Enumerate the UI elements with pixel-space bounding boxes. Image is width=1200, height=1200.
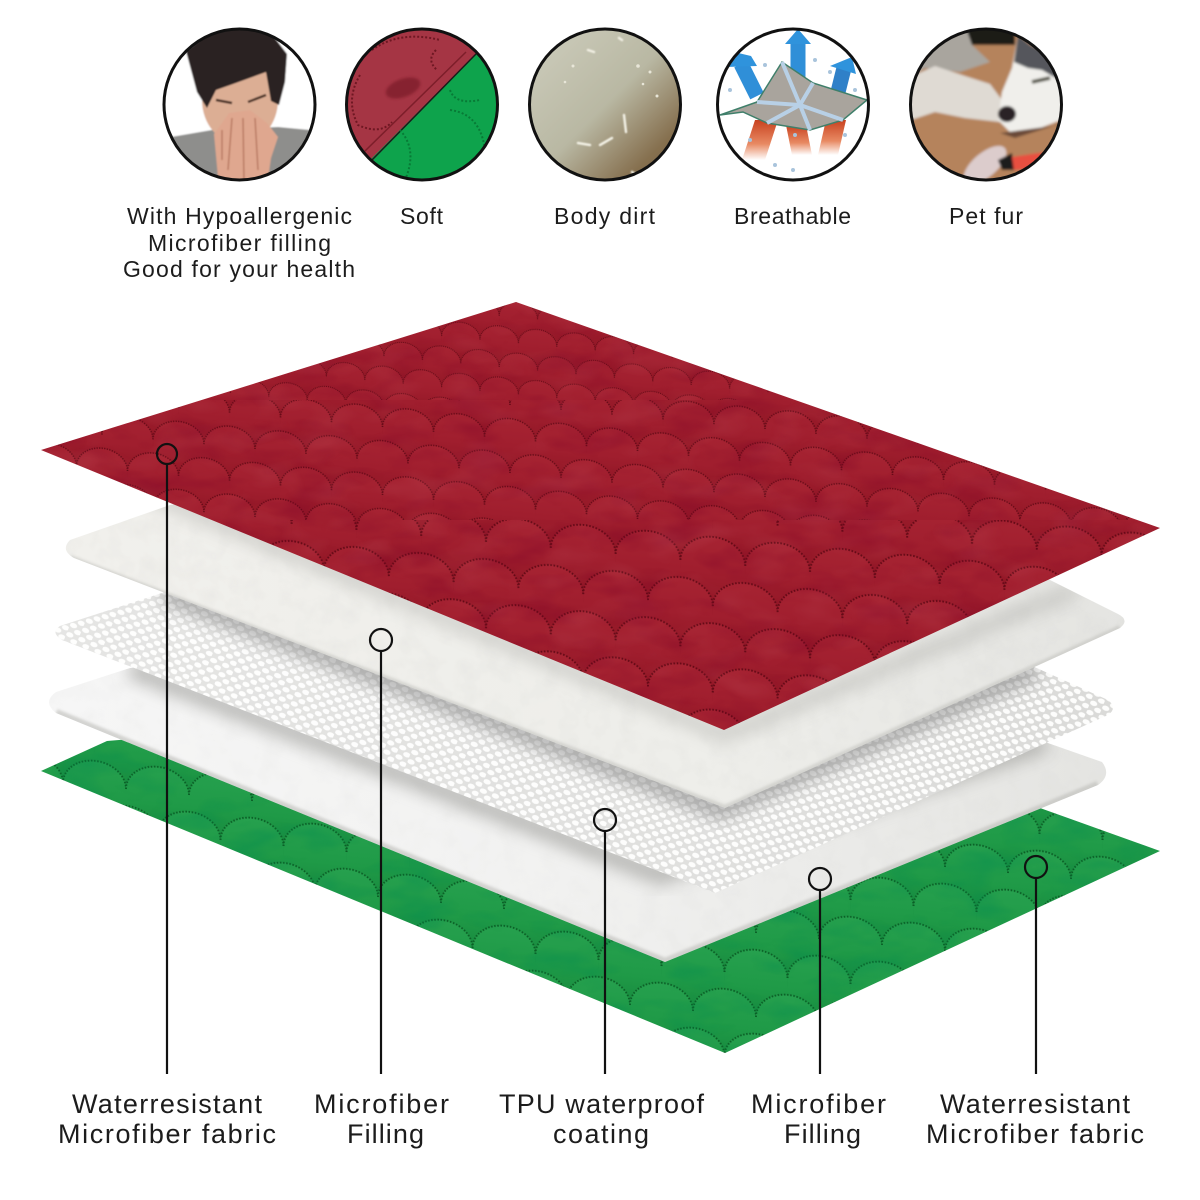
layer: lower microfiber filling [49, 668, 1106, 962]
text: soft caption: Soft [400, 203, 444, 229]
marker: TPU pointer [594, 809, 616, 1074]
text: breathable caption: Breathable [734, 203, 851, 229]
label: waterresistant microfiber fabric left: Waterresistant [72, 1089, 262, 1119]
layer: TPU waterproof coating [56, 592, 1113, 892]
label: microfiber filling left [314, 1089, 449, 1149]
label: waterresistant microfiber fabric right: Microfiber fabric [926, 1119, 1144, 1149]
label: microfiber filling left: Microfiber [314, 1089, 449, 1119]
text: pet fur caption: Pet fur [949, 203, 1023, 229]
text: hypoallergenic caption: With Hypoallergenic [127, 203, 352, 229]
label: microfiber filling right: Filling [784, 1119, 861, 1149]
icon: breathable fabric [720, 30, 867, 172]
icon: breathable ring [718, 29, 868, 180]
marker: red fabric pointer [157, 444, 177, 1074]
layer: red waterresistant fabric [30, 295, 1170, 740]
layer: green waterresistant fabric [41, 740, 1160, 1053]
label: microfiber filling right [751, 1089, 886, 1149]
icon: pet fur ring [910, 29, 1062, 180]
text: hypoallergenic caption [123, 203, 355, 282]
text: hypoallergenic caption: Microfiber filling [148, 230, 331, 256]
marker: upper filling pointer [370, 629, 392, 1074]
icon: man ring [164, 29, 315, 180]
icon: soft ring [346, 29, 498, 180]
icon: soft fabric swatch [348, 30, 496, 178]
label: microfiber filling left: Filling [347, 1119, 424, 1149]
text: body dirt caption: Body dirt [554, 203, 656, 229]
marker: green fabric pointer [1025, 856, 1047, 1074]
icon: husky and pet fur [912, 30, 1060, 178]
label: microfiber filling right: Microfiber [751, 1089, 886, 1119]
text: hypoallergenic caption: Good for your health [123, 256, 355, 282]
icon: man covering nose [172, 30, 309, 178]
label: TPU waterproof coating [499, 1089, 704, 1149]
label: waterresistant microfiber fabric right: Waterresistant [940, 1089, 1130, 1119]
label: waterresistant microfiber fabric left: Microfiber fabric [58, 1119, 276, 1149]
label: TPU waterproof coating: coating [553, 1119, 649, 1149]
marker: lower filling pointer [809, 868, 831, 1074]
label: TPU waterproof coating: TPU waterproof [499, 1089, 704, 1119]
label: waterresistant microfiber fabric right [926, 1089, 1144, 1149]
icon: dirt ring [530, 29, 680, 180]
layer: upper microfiber filling [66, 504, 1124, 808]
icon: body dirt close-up [531, 30, 679, 178]
label: waterresistant microfiber fabric left [58, 1089, 276, 1149]
